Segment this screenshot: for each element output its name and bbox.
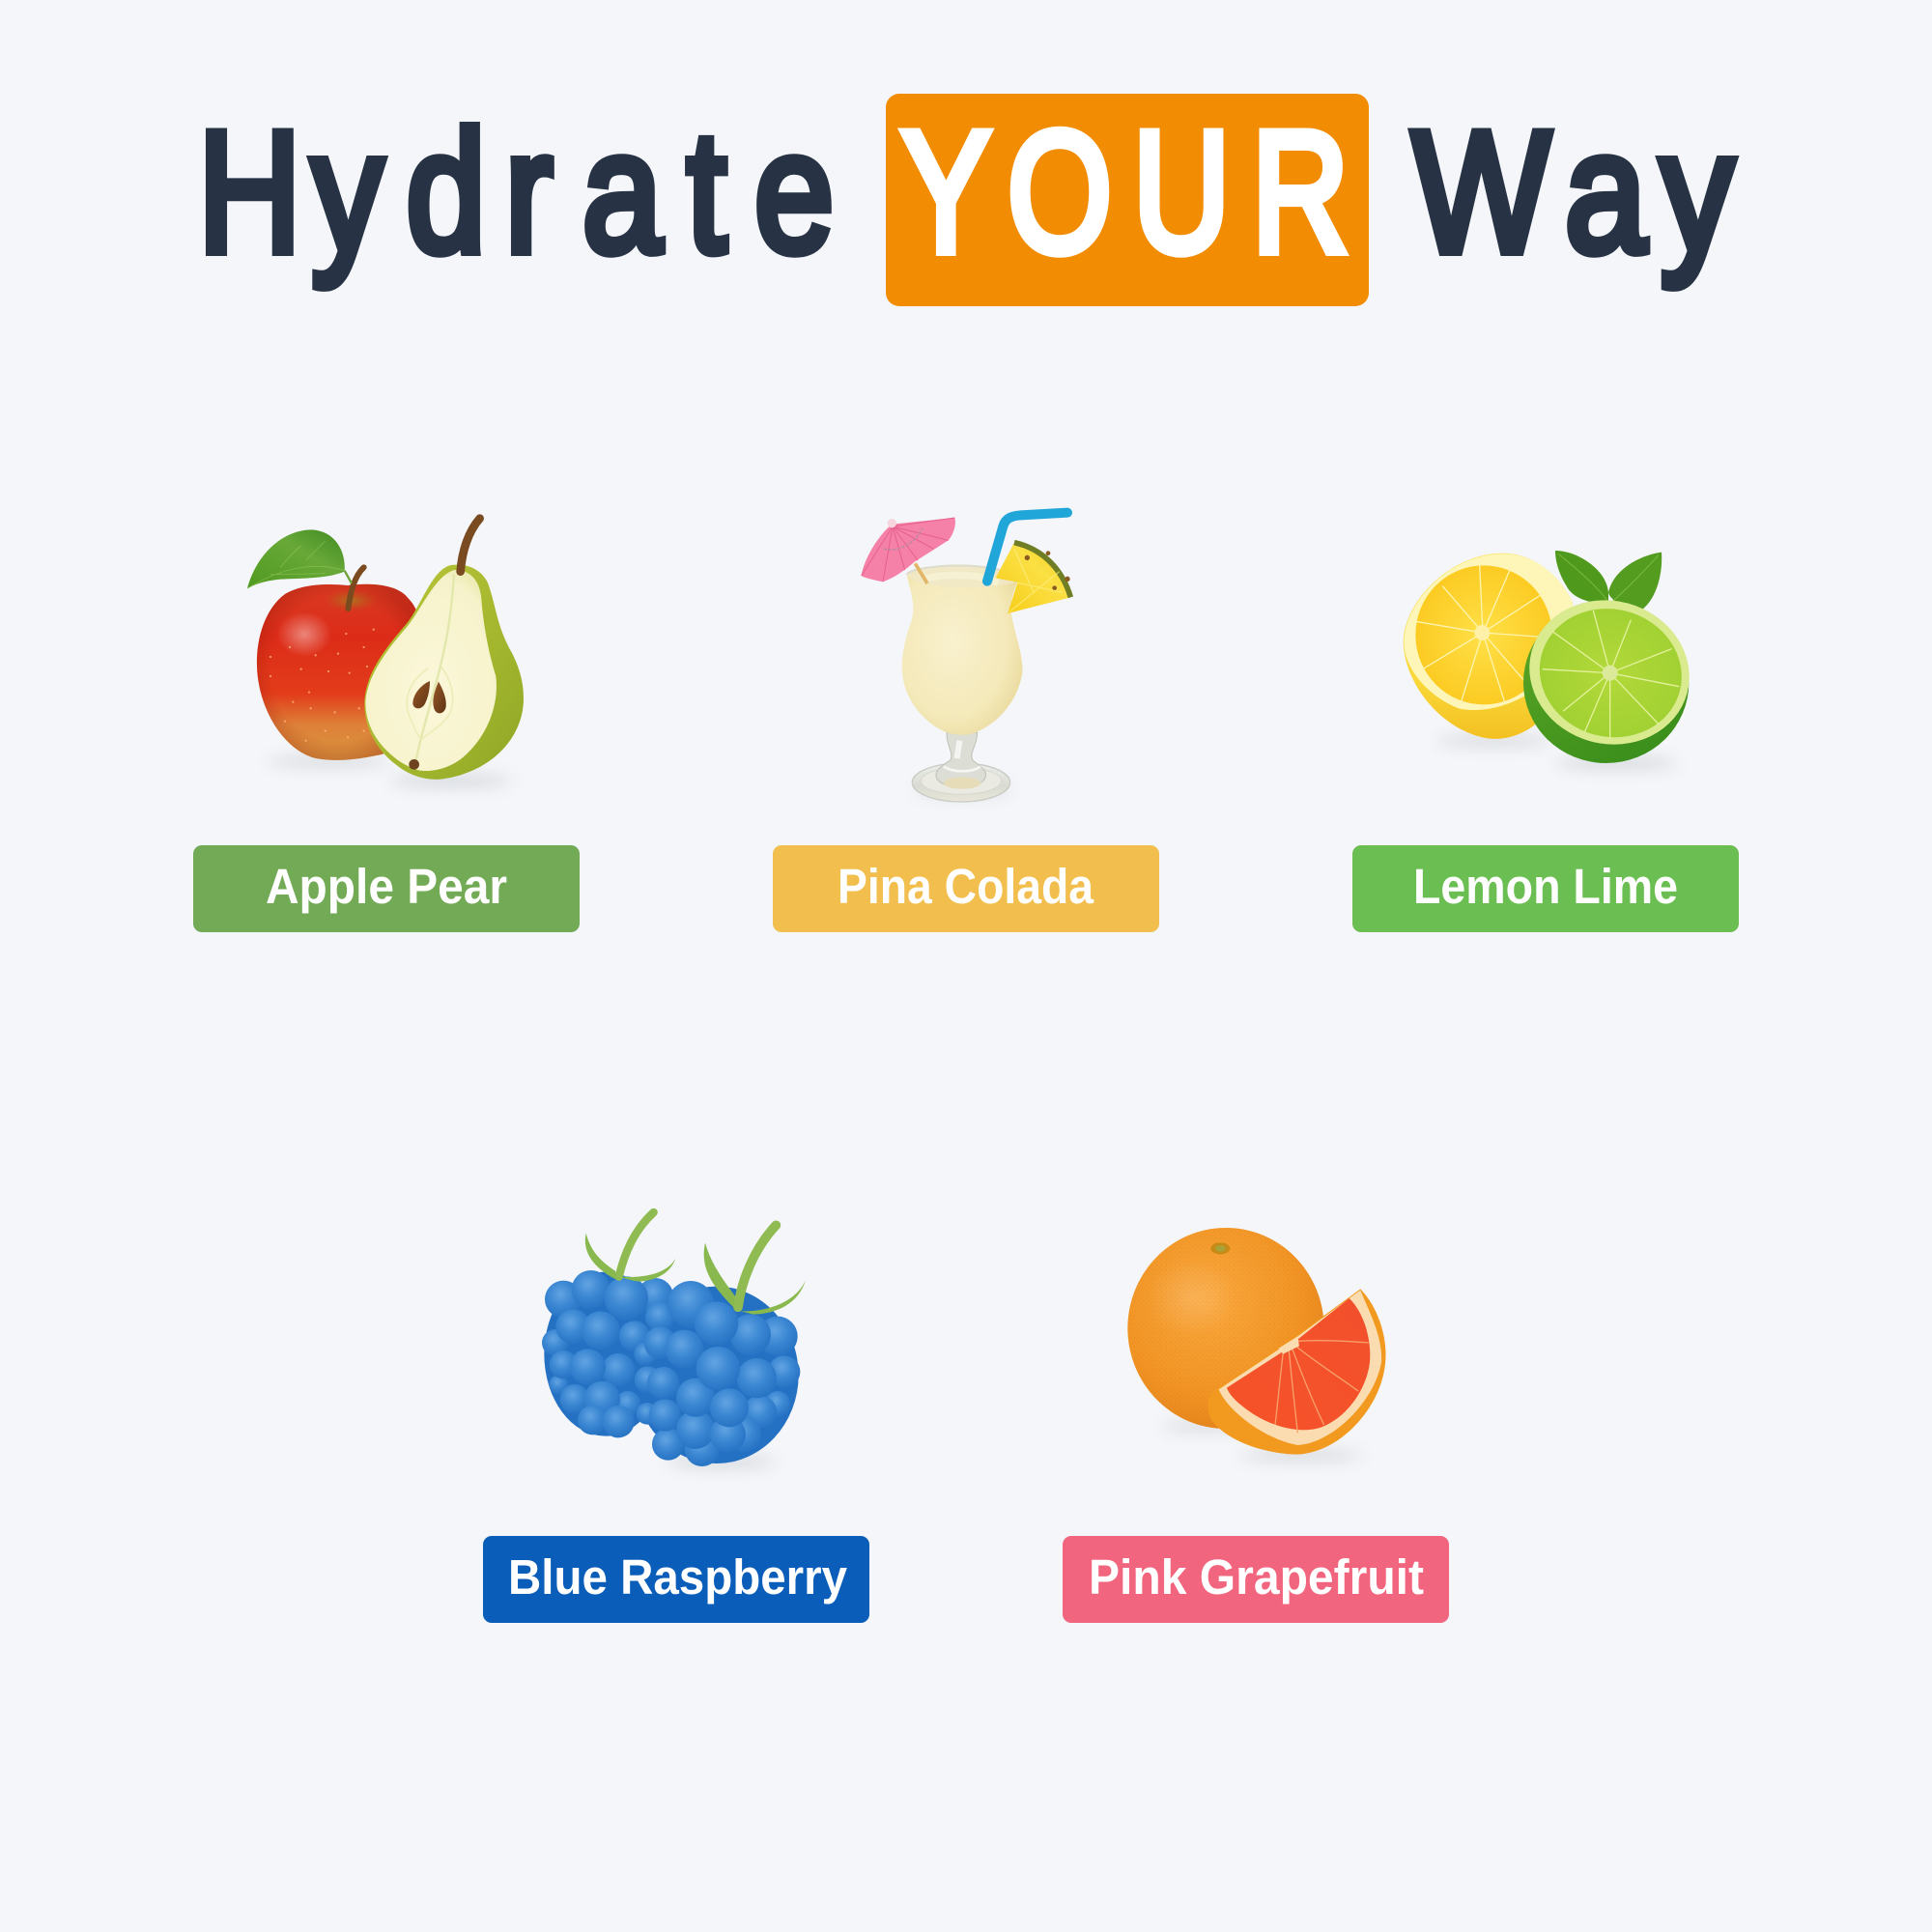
label pill: Pina Colada xyxy=(773,845,1159,932)
label pill: Apple Pear: Apple Pear xyxy=(266,859,507,914)
panel: pink grapefruit xyxy=(1063,1228,1449,1623)
icon: pina colada drink xyxy=(862,513,1070,802)
label pill: Pink Grapefruit xyxy=(1063,1536,1449,1623)
label pill: Pink Grapefruit: Pink Grapefruit xyxy=(1089,1549,1424,1605)
icon: blue raspberries xyxy=(542,1212,806,1467)
title word: Hydrate: Hydrate xyxy=(198,96,834,288)
label pill: Lemon Lime: Lemon Lime xyxy=(1413,859,1678,914)
glass foot xyxy=(912,763,1010,802)
title word: Way: Way xyxy=(1412,96,1734,289)
straw xyxy=(987,513,1067,582)
pineapple wedge xyxy=(996,543,1070,613)
panel: pina colada xyxy=(773,513,1159,932)
icon: apple and pear xyxy=(247,519,524,786)
highlight badge: YOUR: YOUR xyxy=(901,96,1349,288)
glass bowl xyxy=(902,564,1022,735)
umbrella xyxy=(915,563,927,583)
label pill: Pina Colada: Pina Colada xyxy=(838,859,1094,914)
label pill: Blue Raspberry xyxy=(483,1536,869,1623)
label pill: Lemon Lime xyxy=(1352,845,1739,932)
icon: lemon and lime xyxy=(1404,551,1706,768)
panel: lemon lime xyxy=(1352,551,1739,932)
panel: apple pear xyxy=(193,519,580,932)
label pill: Apple Pear xyxy=(193,845,580,932)
label pill: Blue Raspberry: Blue Raspberry xyxy=(508,1549,848,1605)
icon: grapefruit and wedge xyxy=(1127,1228,1385,1460)
panel: blue raspberry xyxy=(483,1212,869,1623)
title xyxy=(198,94,1734,306)
